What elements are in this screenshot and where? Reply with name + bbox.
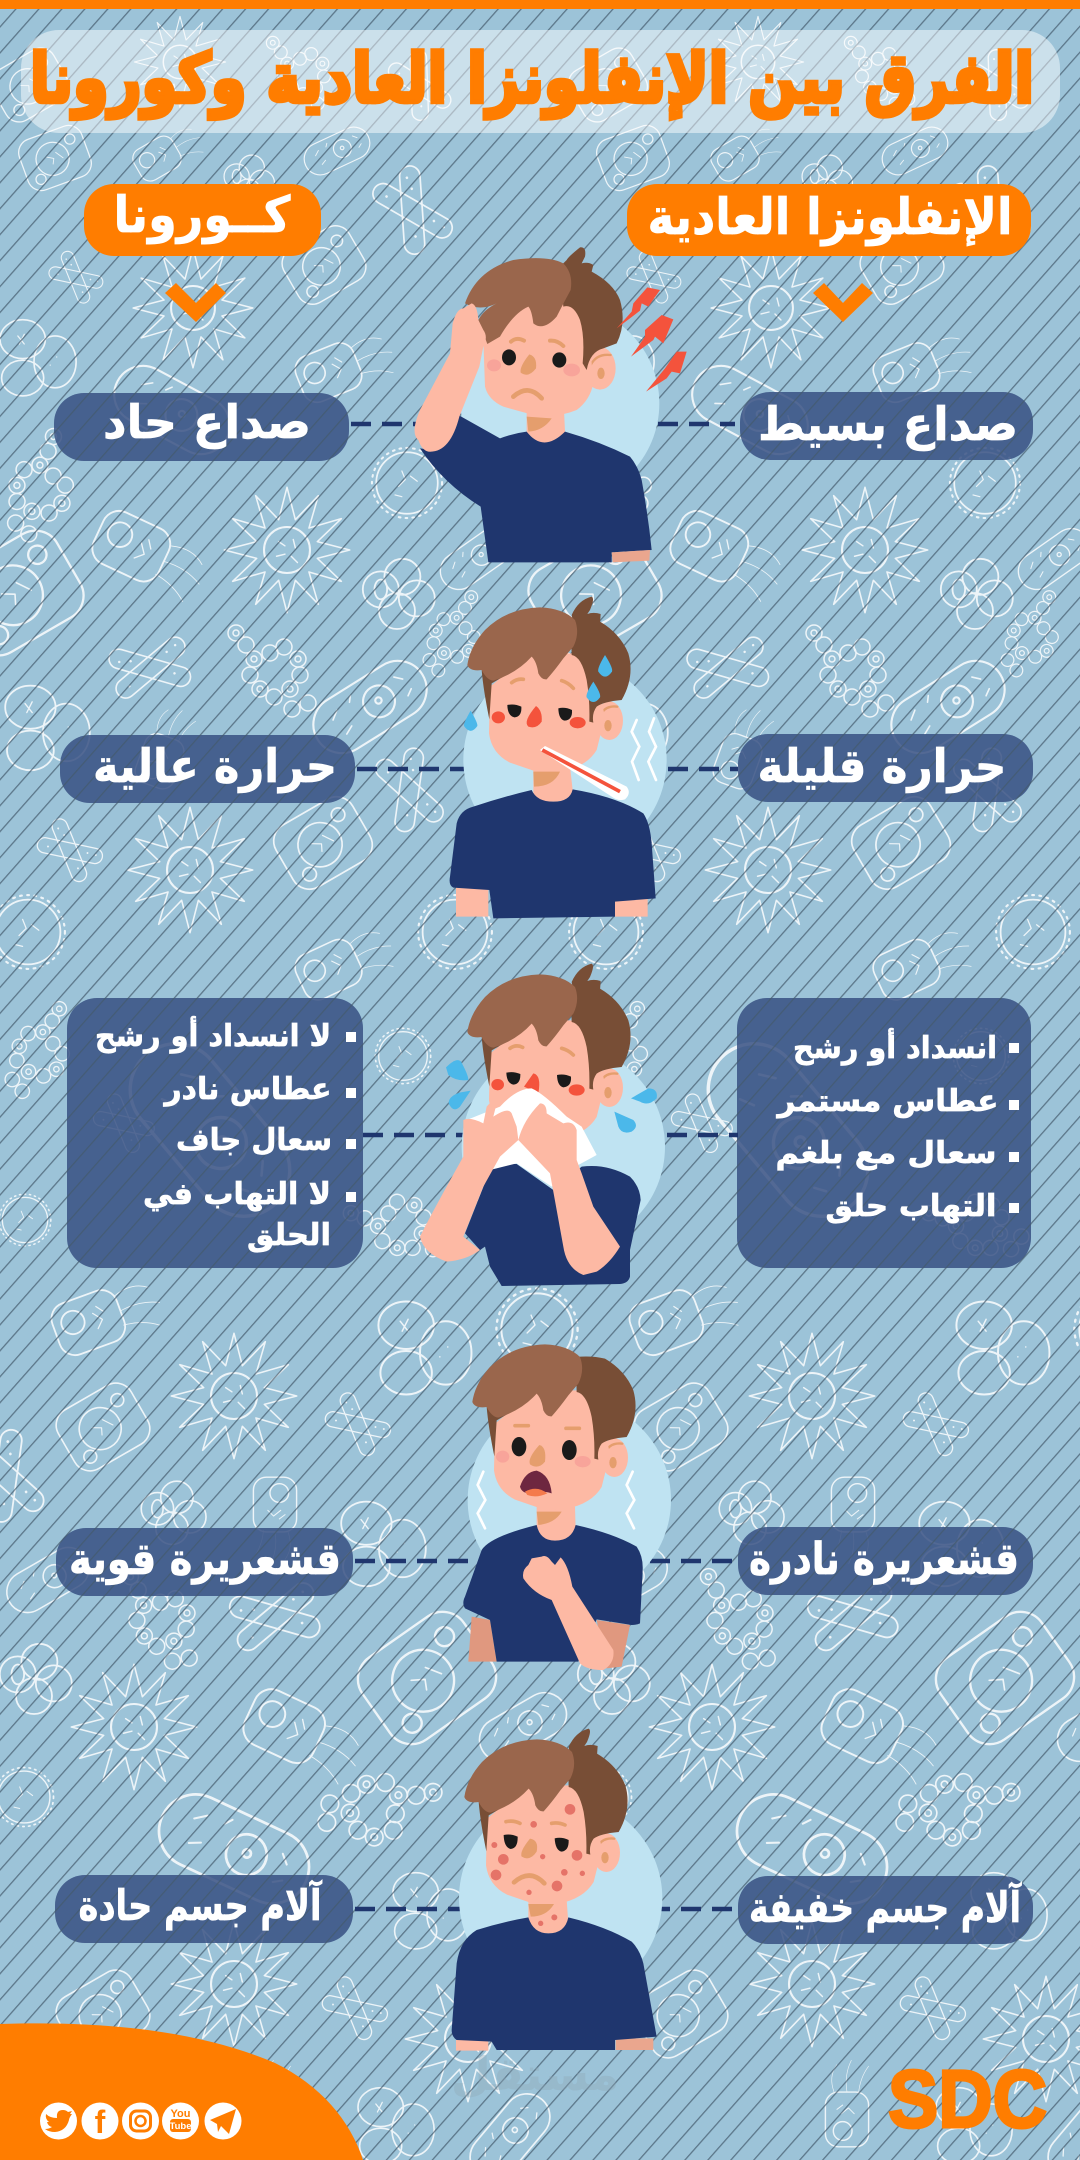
logo: SDC: [888, 2054, 1047, 2145]
list: corona respiratory symptoms: عطاس نادر: [163, 1072, 332, 1107]
label: low fever: حرارة قليلة: [758, 739, 1006, 793]
watermark: مستقل: [451, 2047, 619, 2101]
icon: telegram: [204, 2102, 242, 2140]
list: corona respiratory symptoms: [95, 1016, 356, 1253]
footer orange shape: [0, 2023, 363, 2160]
symptom pills and panels: [54, 392, 1033, 1944]
label: high fever: حرارة عالية: [93, 739, 337, 793]
header: influenza: الإنفلونزا العادية: [648, 188, 1012, 247]
list: influenza respiratory symptoms: سعال مع بلغم: [776, 1136, 996, 1171]
header: corona: كــورونا: [114, 186, 291, 245]
list: corona respiratory symptoms: سعال جاف: [176, 1123, 332, 1158]
connector dashes: [351, 424, 738, 1909]
social icons: [40, 2102, 242, 2140]
icon: youtube: You: [171, 2108, 190, 2120]
label: rare chills: قشعريرة نادرة: [749, 1534, 1019, 1585]
list: corona respiratory symptoms: لا التهاب في: [143, 1177, 331, 1212]
list: corona respiratory symptoms: لا انسداد أو رشح: [95, 1016, 331, 1054]
list: corona respiratory symptoms: الحلق: [247, 1218, 331, 1253]
icon: instagram: [122, 2102, 159, 2140]
icon: youtube: [162, 2102, 199, 2140]
illustration: boy with rash: [452, 1729, 662, 2051]
list: influenza respiratory symptoms: [775, 1028, 1019, 1224]
illustration: boy with headache: [415, 247, 687, 562]
list: influenza respiratory symptoms: التهاب حلق: [826, 1189, 996, 1224]
label: severe body aches: آلام جسم حادة: [78, 1880, 323, 1931]
label: mild headache: صداع بسيط: [758, 397, 1018, 451]
label: strong chills: قشعريرة قوية: [69, 1534, 341, 1585]
icon: facebook: f: [95, 2104, 106, 2140]
icon: youtube: Tube: [170, 2121, 192, 2132]
label: severe headache: صداع حاد: [103, 395, 311, 449]
header: corona: [84, 184, 321, 256]
arrow: corona chevron: [165, 283, 226, 322]
title panel: [21, 30, 1060, 133]
arrow: influenza chevron: [813, 283, 873, 322]
illustration: boy blowing nose: [420, 964, 665, 1286]
illustration: boy with thermometer: [450, 597, 667, 918]
list: influenza respiratory symptoms: عطاس مستمر: [775, 1084, 998, 1119]
icon: facebook: [82, 2102, 118, 2140]
illustration: boy with chills: [463, 1344, 671, 1670]
list: influenza respiratory symptoms: انسداد أو رشح: [793, 1028, 997, 1066]
top bar: [0, 0, 1080, 9]
icon: twitter: [40, 2102, 77, 2140]
